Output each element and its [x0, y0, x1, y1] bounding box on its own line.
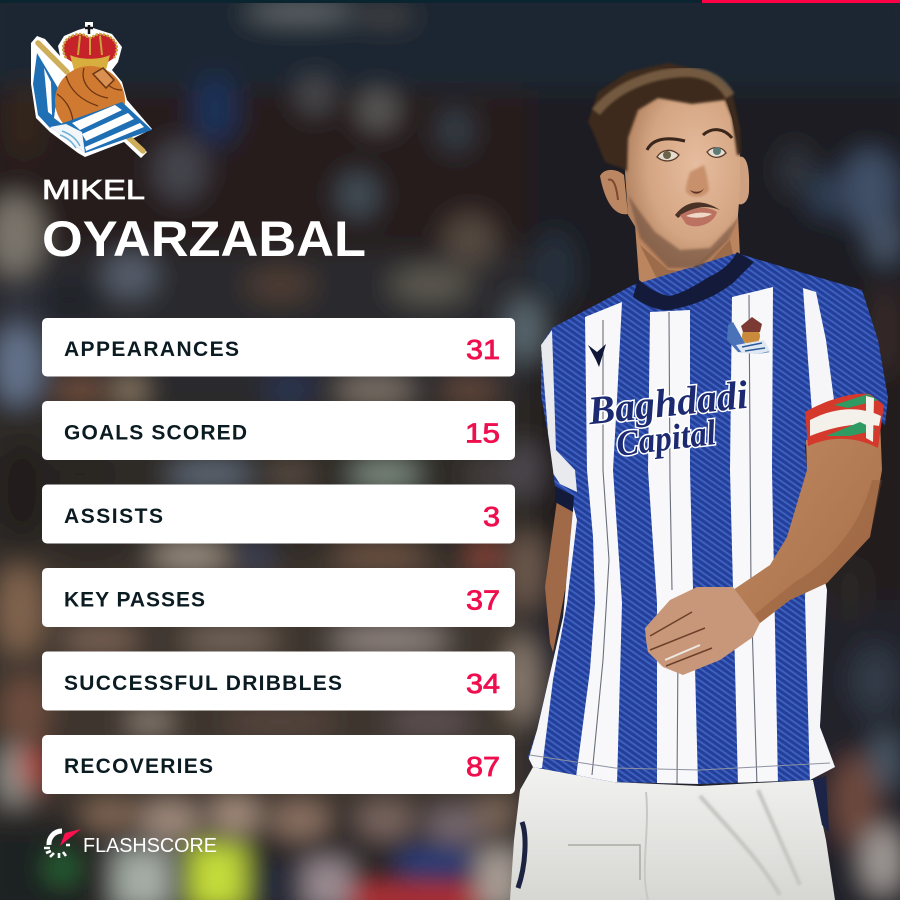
right ear [738, 157, 749, 204]
neck [635, 215, 740, 292]
collar [633, 252, 754, 310]
stat row: appearances: APPEARANCES [64, 338, 239, 361]
left sleeve cuff [555, 486, 574, 512]
player first name: MIKEL [42, 174, 145, 205]
pinstripes [592, 295, 757, 786]
hair [588, 63, 741, 172]
hem [530, 755, 830, 770]
nose [686, 165, 709, 197]
captain armband [805, 394, 884, 448]
crest white outline [31, 22, 152, 158]
stat row: assists [42, 484, 515, 544]
eyebrows and eyes [647, 130, 732, 161]
top edge bar [0, 0, 900, 3]
near arm [733, 420, 882, 623]
player last name: OYARZABAL [42, 211, 366, 267]
stat row: key passes: KEY PASSES [64, 588, 205, 612]
sponsor text: Capital [614, 412, 718, 464]
sponsor text [585, 372, 750, 464]
stat row: assists: 3 [483, 501, 500, 532]
stat row: goals scored [42, 401, 515, 460]
sponsor text: Baghdadi [585, 372, 750, 433]
stat row: recoveries: RECOVERIES [64, 755, 213, 778]
shorts [510, 767, 835, 900]
stubble shadow [628, 195, 738, 268]
wordmark: FLASHSCORE [83, 835, 217, 857]
stat row: appearances: 31 [466, 334, 500, 365]
blue flag upper [33, 53, 62, 128]
icon: speedometer mark [44, 829, 81, 858]
stat row: assists: ASSISTS [64, 505, 163, 528]
jersey crest [727, 317, 770, 354]
stat row: successful dribbles: 34 [466, 668, 500, 699]
stat row: successful dribbles [42, 652, 515, 710]
mustache and mouth [675, 202, 720, 226]
Flashscore logo [44, 829, 217, 858]
kit maker logo [588, 344, 606, 367]
striped flag [50, 102, 152, 153]
player photo illustration [510, 63, 900, 900]
hand [645, 587, 760, 675]
stat row: recoveries: 87 [466, 751, 500, 782]
club crest: Real Sociedad [31, 22, 152, 158]
stat row: goals scored: GOALS SCORED [64, 422, 247, 444]
leather ball [55, 66, 125, 136]
stat row: successful dribbles: SUCCESSFUL DRIBBLES [64, 672, 342, 695]
stat row: recoveries [42, 735, 515, 794]
face [625, 92, 740, 268]
far arm [545, 500, 574, 652]
stat row: key passes [42, 568, 515, 627]
white stripes [541, 330, 577, 492]
stat row: goals scored: 15 [465, 418, 500, 448]
left ear [600, 170, 628, 214]
stat row: key passes: 37 [466, 584, 500, 616]
crown [63, 25, 117, 70]
flag pole [38, 43, 143, 151]
jersey with vertical stripes [520, 250, 900, 790]
stat row: appearances [42, 318, 515, 376]
